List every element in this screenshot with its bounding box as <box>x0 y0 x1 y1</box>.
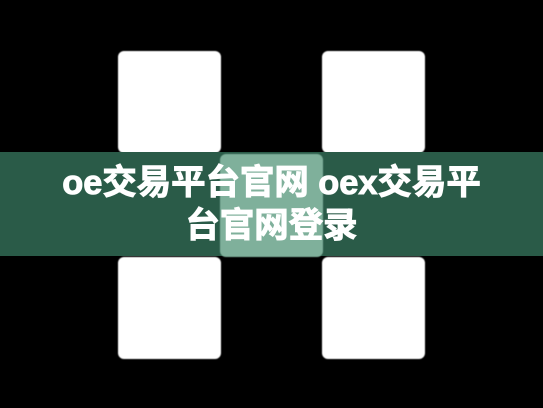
title band <box>0 152 543 256</box>
title <box>62 163 481 245</box>
icon: bottom-left white square <box>118 257 221 359</box>
title: 台官网登录 <box>186 207 357 245</box>
icon: top-left white square <box>118 51 221 153</box>
title: oe交易平台官网 oex交易平 <box>62 164 481 202</box>
icon: bottom-right white square <box>322 257 425 359</box>
icon: top-right white square <box>322 51 425 153</box>
icon: centre green square <box>220 154 323 257</box>
